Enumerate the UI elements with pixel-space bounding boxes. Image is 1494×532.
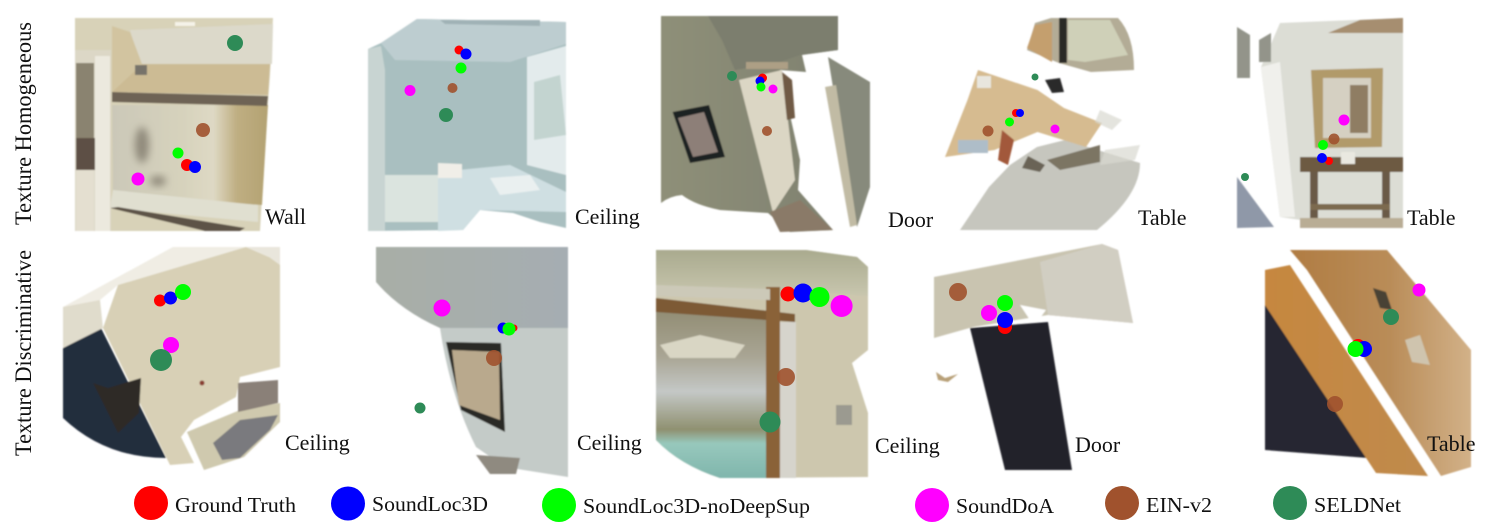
- legend item: EIN-v2: [1105, 486, 1212, 520]
- legend item: SoundDoA: SoundDoA: [956, 494, 1055, 518]
- photo: cream room with navy floor: [63, 247, 280, 470]
- legend: [134, 486, 1401, 522]
- legend item: SELDNet: SELDNet: [1314, 493, 1401, 517]
- row label: Texture Discriminative: Texture Discriminative: [11, 250, 36, 456]
- label: Door: Door: [888, 207, 934, 232]
- photo: mirror and console: [1237, 18, 1403, 228]
- legend item: SoundLoc3D-noDeepSup: [542, 488, 810, 522]
- dots: ceiling predictions: [404, 46, 472, 122]
- photo: black door: [934, 244, 1133, 470]
- dots: wall predictions: [132, 35, 243, 186]
- label: Ceiling: Ceiling: [285, 430, 350, 455]
- dots: door predictions: [727, 71, 778, 136]
- dots: wooden table predictions: [1327, 284, 1426, 412]
- legend item: SoundLoc3D: [331, 486, 488, 520]
- label: Table: Table: [1138, 205, 1187, 230]
- legend item: SELDNet: [1273, 486, 1401, 520]
- photo: porch with wooden frame: [656, 250, 868, 478]
- photo: shower wall: [75, 18, 273, 231]
- photo: white door in olive room: [661, 16, 870, 232]
- photo: wall with painting: [376, 247, 568, 477]
- dots: painting predictions: [414, 300, 518, 414]
- panel: bathroom ceiling scene: [368, 19, 640, 231]
- panel: wall scene: [75, 18, 306, 231]
- label: Ceiling: Ceiling: [577, 430, 642, 455]
- label: Table: Table: [1407, 205, 1456, 230]
- dots: table predictions: [982, 74, 1060, 136]
- row label: Texture Homogeneous: Texture Homogeneous: [11, 22, 36, 225]
- panel: black door scene: [934, 244, 1133, 470]
- panel: mirror table scene: [1237, 18, 1456, 230]
- label: Ceiling: Ceiling: [875, 433, 940, 458]
- legend item: Ground Truth: [134, 486, 297, 520]
- panel: door scene: [661, 16, 934, 232]
- label: Ceiling: Ceiling: [575, 204, 640, 229]
- photo: wooden boards: [1265, 250, 1471, 476]
- label: Door: Door: [1075, 432, 1121, 457]
- label: Wall: Wall: [265, 204, 306, 229]
- photo: blue bathroom: [368, 19, 566, 231]
- dots: mirror table predictions: [1241, 114, 1350, 181]
- legend item: EIN-v2: EIN-v2: [1146, 493, 1212, 517]
- label: Table: Table: [1427, 431, 1476, 456]
- legend item: Ground Truth: Ground Truth: [175, 493, 297, 517]
- legend item: SoundLoc3D: SoundLoc3D: [372, 492, 488, 516]
- panel: table top-down scene: [945, 18, 1187, 230]
- panel: framed painting scene: [376, 247, 642, 477]
- dots: ceiling corner predictions: [150, 284, 191, 371]
- legend item: SoundLoc3D-noDeepSup: SoundLoc3D-noDeepSup: [583, 494, 810, 518]
- legend item: SoundDoA: [915, 488, 1055, 522]
- panel: ceiling corner scene: [63, 247, 350, 470]
- dots: porch predictions: [760, 284, 853, 432]
- dots: black door predictions: [949, 283, 1013, 334]
- panel: porch scene: [656, 250, 940, 478]
- panel: wooden table scene: [1265, 250, 1476, 476]
- photo: table and floor: [945, 18, 1140, 230]
